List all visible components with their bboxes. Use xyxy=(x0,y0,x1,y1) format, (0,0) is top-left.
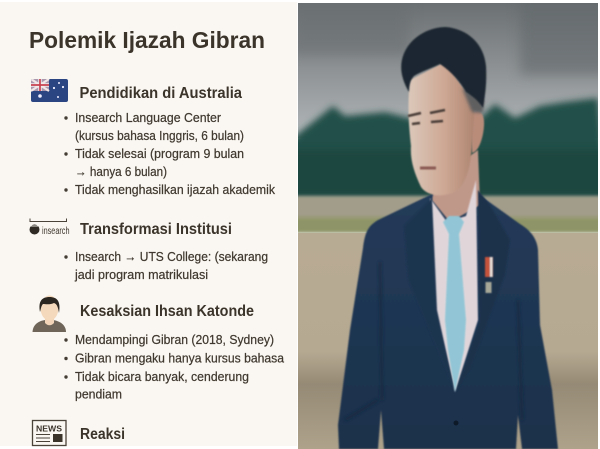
heading: Reaksi: Reaksi xyxy=(80,426,125,443)
suit jacket xyxy=(338,194,558,449)
icon: Australian flag xyxy=(31,79,68,102)
eyes and mouth xyxy=(408,110,445,168)
list: Transformasi Institusi: jadi program matrikulasi xyxy=(74,268,208,282)
neck xyxy=(432,150,480,222)
medal xyxy=(485,257,493,293)
photo background xyxy=(290,0,600,449)
heading: Kesaksian Ihsan Katonde: Kesaksian Ihsan Katonde xyxy=(80,303,254,320)
title: Polemik Ijazah Gibran xyxy=(29,27,265,53)
icon: news: NEWS xyxy=(36,424,62,434)
list: Pendidikan di Australia: Tidak menghasilkan ijazah akademik xyxy=(75,183,276,197)
heading: Pendidikan di Australia: Pendidikan di Australia xyxy=(80,85,242,102)
list: Pendidikan di Australia: → hanya 6 bulan) xyxy=(75,165,167,179)
list: Transformasi Institusi: Insearch → UTS College: (sekarang xyxy=(75,250,268,264)
shirt xyxy=(430,180,478,392)
list: Pendidikan di Australia: Insearch Language Center xyxy=(75,111,221,125)
photo: man in navy suit xyxy=(290,0,600,449)
list: Pendidikan di Australia: Tidak selesai (program 9 bulan xyxy=(75,147,244,161)
sideburn xyxy=(462,88,484,113)
heading: Transformasi Institusi: Transformasi Institusi xyxy=(80,221,232,238)
jacket folds xyxy=(345,262,522,420)
icon: insearch logo: insearch xyxy=(42,226,70,237)
list: Kesaksian Ihsan Katonde: pendiam xyxy=(75,388,122,402)
list: Kesaksian Ihsan Katonde: Tidak bicara banyak, cenderung xyxy=(75,370,249,384)
icon: insearch logo xyxy=(30,218,70,237)
list: Pendidikan di Australia: (kursus bahasa Inggris, 6 bulan) xyxy=(75,129,244,143)
face xyxy=(408,62,475,195)
icon: news xyxy=(32,420,66,446)
hair xyxy=(401,27,486,108)
icon: person xyxy=(32,296,66,332)
button xyxy=(454,420,458,426)
list: Kesaksian Ihsan Katonde: Gibran mengaku hanya kursus bahasa xyxy=(75,352,284,366)
ear xyxy=(470,111,484,153)
list: Transformasi Institusi xyxy=(64,250,268,282)
list: Kesaksian Ihsan Katonde: Mendampingi Gibran (2018, Sydney) xyxy=(75,333,274,347)
list: Pendidikan di Australia xyxy=(64,111,276,197)
list: Kesaksian Ihsan Katonde xyxy=(64,333,284,402)
lapels xyxy=(423,198,455,391)
tie xyxy=(443,216,466,392)
